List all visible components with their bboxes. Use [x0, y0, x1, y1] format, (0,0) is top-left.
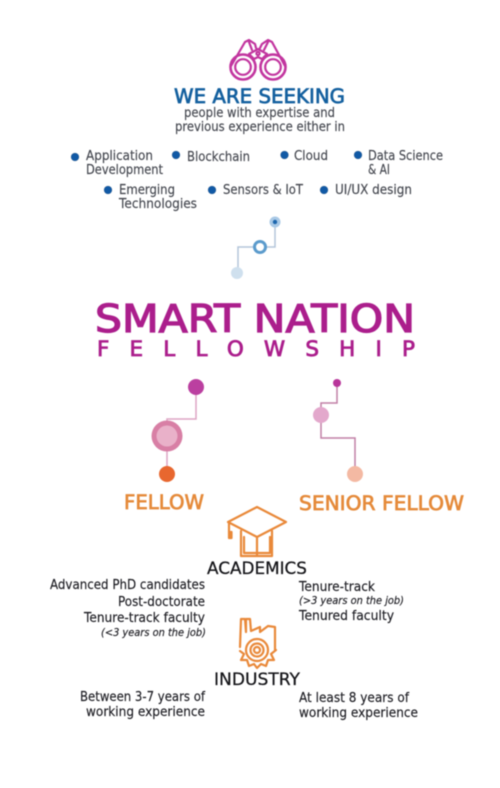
text: fellow academics criteria	[50, 578, 206, 639]
text: senior fellow academics criteria: (>3 years on the job)	[299, 595, 404, 607]
text: fellow academics criteria: (<3 years on the job)	[101, 627, 206, 639]
connector: fellow circuit	[152, 379, 204, 482]
icon: binoculars	[230, 40, 286, 80]
title: smart nation fellowship: SMART NATION	[95, 297, 415, 341]
list: areas of expertise: & AI	[368, 163, 390, 178]
heading: senior fellow: SENIOR FELLOW	[299, 492, 464, 515]
heading: industry: INDUSTRY	[214, 670, 301, 690]
list: areas of expertise: Blockchain	[187, 150, 250, 165]
text: senior fellow academics criteria: Tenure-track	[298, 580, 375, 595]
text: fellow academics criteria: Post-doctorate	[118, 595, 205, 610]
text: senior fellow industry criteria: At least 8 years of	[299, 691, 409, 706]
icon: graduation cap and book	[228, 507, 286, 556]
text: seeking subtitle: people with expertise and	[184, 106, 335, 121]
list: areas of expertise: Development	[86, 163, 163, 178]
heading: fellow: FELLOW	[124, 491, 204, 514]
list: areas of expertise: Technologies	[118, 197, 197, 212]
heading: we are seeking: WE ARE SEEKING	[174, 85, 345, 108]
text: fellow industry criteria: working experience	[86, 705, 205, 720]
title: smart nation fellowship: FELLOWSHIP	[97, 337, 415, 362]
text: fellow academics criteria: Advanced PhD candidates	[50, 578, 205, 593]
heading: academics: ACADEMICS	[207, 559, 307, 579]
text: fellow industry criteria: Between 3-7 years of	[80, 690, 205, 705]
list: areas of expertise: Emerging	[119, 183, 175, 198]
list: areas of expertise	[71, 149, 443, 212]
connector: senior fellow circuit	[313, 379, 363, 482]
text: seeking subtitle	[175, 106, 345, 135]
text: senior fellow industry criteria	[299, 691, 418, 721]
text: senior fellow academics criteria	[298, 580, 404, 624]
icon: factory and gear	[240, 619, 276, 668]
text: senior fellow industry criteria: working experience	[299, 706, 418, 721]
list: areas of expertise: Sensors & IoT	[223, 183, 303, 198]
connector: blue circuit	[231, 216, 280, 279]
list: areas of expertise: UI/UX design	[335, 183, 412, 198]
text: fellow academics criteria: Tenure-track faculty	[83, 611, 205, 626]
list: areas of expertise: Data Science	[368, 149, 443, 164]
text: seeking subtitle: previous experience either in	[175, 120, 345, 135]
title: smart nation fellowship	[95, 297, 415, 362]
text: fellow industry criteria	[80, 690, 205, 720]
text: senior fellow academics criteria: Tenured faculty	[298, 609, 394, 624]
list: areas of expertise: Cloud	[294, 149, 328, 164]
list: areas of expertise: Application	[86, 149, 153, 164]
